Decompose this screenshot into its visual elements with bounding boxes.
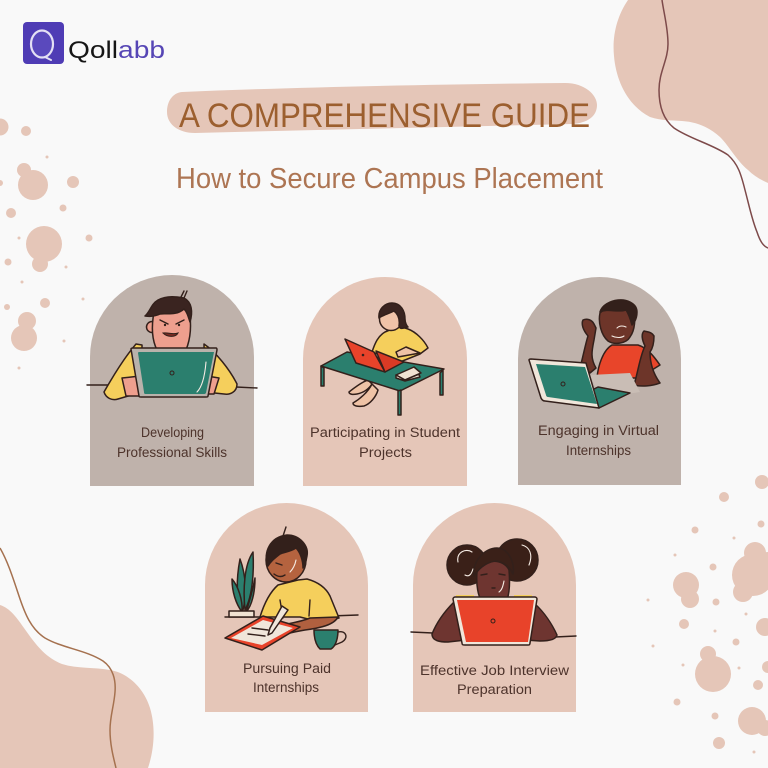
label: Internships	[566, 443, 631, 458]
panel: Effective Job Interview Preparation	[411, 503, 576, 712]
label: Professional Skills	[117, 445, 227, 460]
logo	[23, 22, 165, 64]
subtitle: How to Secure Campus Placement	[176, 163, 603, 195]
label: Effective Job Interview	[420, 663, 569, 678]
label	[243, 661, 331, 695]
title	[167, 83, 597, 135]
label	[420, 663, 569, 697]
label: Engaging in Virtual	[538, 423, 659, 438]
plant	[229, 552, 255, 617]
title: A COMPREHENSIVE GUIDE	[179, 97, 590, 135]
illustration: woman at table with red laptop	[321, 303, 444, 415]
illustration: man at green laptop	[87, 291, 257, 400]
label: Internships	[253, 680, 319, 695]
panel: Engaging in Virtual Internships	[518, 277, 681, 485]
label: Projects	[359, 445, 412, 460]
label: Preparation	[457, 682, 532, 697]
illustration: girl with hair puffs at red laptop	[411, 539, 576, 645]
label	[310, 425, 460, 460]
panel: Developing Professional Skills	[87, 275, 257, 486]
dots: right cluster	[646, 475, 768, 754]
label	[538, 423, 659, 458]
illustration: girl writing on red tablet	[225, 527, 358, 650]
blob: top right	[614, 0, 768, 248]
panel: Participating in Student Projects	[303, 277, 467, 486]
logo wordmark: Qoll abb	[68, 37, 165, 64]
dots: left cluster	[0, 118, 92, 370]
label: Developing	[141, 425, 204, 440]
logo icon	[23, 22, 64, 64]
label	[117, 425, 227, 460]
label: Participating in Student	[310, 425, 460, 440]
label: Pursuing Paid	[243, 661, 331, 676]
blob: bottom left	[0, 548, 154, 768]
illustration: boy waving beside green laptop	[529, 300, 660, 408]
panel: Pursuing Paid Internships	[205, 503, 368, 712]
